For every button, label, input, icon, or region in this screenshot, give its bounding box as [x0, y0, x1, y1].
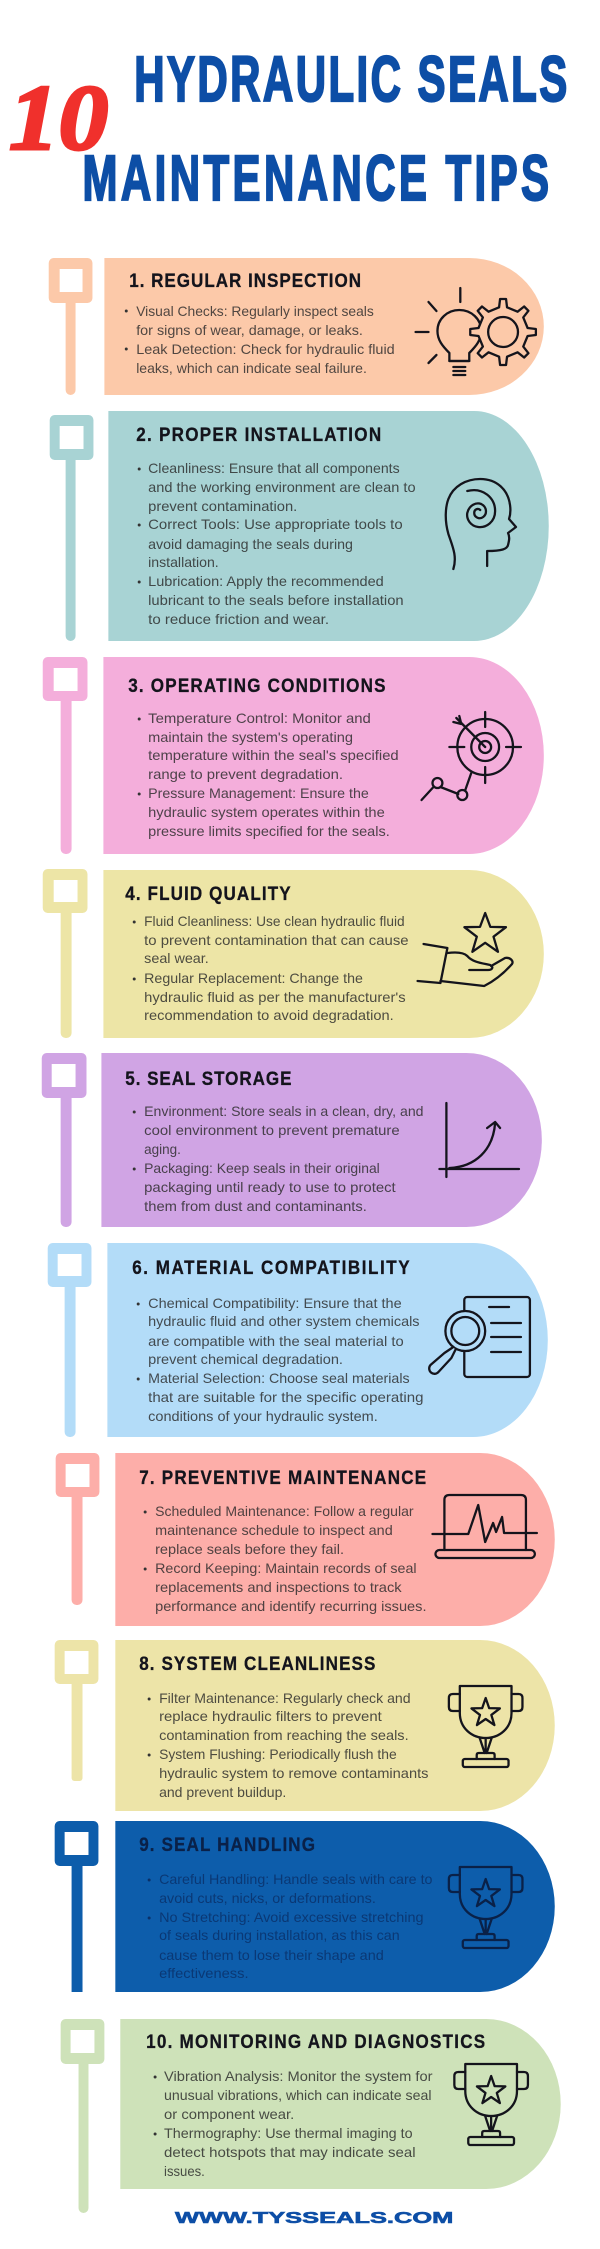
icon: growth curve chart — [439, 1103, 519, 1177]
panel 3: operating conditions — [43, 657, 544, 854]
panel 5: seal storage — [42, 1053, 542, 1227]
panel 1: regular inspection — [49, 258, 544, 395]
body text 10: Vibration Analysis: Monitor the system for — [164, 2068, 433, 2084]
body text 9: avoid cuts, nicks, or deformations. — [159, 1890, 376, 1906]
body text 2 — [138, 460, 416, 627]
body text 1: Visual Checks: Regularly inspect seals — [136, 303, 374, 319]
body text 4: Regular Replacement: Change the — [144, 970, 363, 986]
body text 4: to prevent contamination that can cause — [144, 932, 409, 948]
panel 8: system cleanliness — [55, 1640, 555, 1811]
body text 5: aging. — [144, 1141, 181, 1157]
heading 10: 10. MONITORING AND DIAGNOSTICS — [146, 2030, 485, 2052]
heading 8: 8. SYSTEM CLEANLINESS — [139, 1652, 375, 1674]
body text 3: pressure limits specified for the seals. — [148, 823, 390, 839]
tab marker 9 — [55, 1821, 98, 1992]
body text 5: Packaging: Keep seals in their original — [144, 1160, 380, 1176]
body text 2: Cleanliness: Ensure that all components — [148, 460, 400, 476]
icon: head with spiral — [446, 479, 516, 569]
body text 1 — [125, 303, 395, 376]
body text 6: Material Selection: Choose seal materials — [148, 1370, 410, 1386]
body text 2: Correct Tools: Use appropriate tools to — [148, 516, 403, 532]
body text 3: Temperature Control: Monitor and — [148, 710, 371, 726]
body text 3: temperature within the seal's specified — [148, 747, 399, 763]
body text 3: maintain the system's operating — [148, 729, 353, 745]
body text 5: packaging until ready to use to protect — [144, 1179, 396, 1195]
body text 2: prevent contamination. — [148, 498, 297, 514]
footer website: WWW.TYSSEALS.COM — [175, 2210, 453, 2227]
icon: hand holding star — [418, 913, 513, 986]
heading 4: 4. FLUID QUALITY — [125, 882, 291, 904]
tab marker 2 — [50, 415, 93, 641]
body text 5: them from dust and contaminants. — [144, 1198, 367, 1214]
body text 3 — [138, 710, 399, 839]
body text 3: Pressure Management: Ensure the — [148, 785, 369, 801]
body text 10: issues. — [164, 2163, 205, 2179]
title — [83, 44, 567, 214]
tab marker 8 — [55, 1640, 98, 1781]
icon: trophy on green — [454, 2064, 528, 2145]
icon: trophy — [449, 1686, 522, 1767]
title: MAINTENANCE TIPS — [83, 143, 549, 214]
icon: laptop with pulse line — [432, 1495, 537, 1558]
body text 6: prevent chemical degradation. — [148, 1351, 343, 1367]
icon: trophy on blue — [449, 1867, 522, 1948]
heading 7: 7. PREVENTIVE MAINTENANCE — [139, 1466, 426, 1488]
body text 9: effectiveness. — [159, 1965, 249, 1981]
panel 4: fluid quality — [43, 869, 544, 1038]
tab marker 6 — [48, 1243, 91, 1437]
body text 6: conditions of your hydraulic system. — [148, 1408, 378, 1424]
heading 1: 1. REGULAR INSPECTION — [129, 269, 361, 291]
panel 6: material compatibility — [48, 1243, 548, 1437]
icon: light bulb and gear — [416, 288, 536, 375]
body text 10: or component wear. — [164, 2106, 294, 2122]
body text 6 — [137, 1295, 424, 1424]
title: HYDRAULIC SEALS — [134, 44, 567, 115]
body text 3: hydraulic system operates within the — [148, 804, 385, 820]
body text 2: avoid damaging the seals during — [148, 536, 353, 552]
body text 9: No Stretching: Avoid excessive stretching — [159, 1909, 424, 1925]
icon: target with arrow and line chart — [422, 712, 521, 800]
panel 7: preventive maintenance — [56, 1453, 555, 1626]
body text 10: detect hotspots that may indicate seal — [164, 2144, 416, 2160]
panel 9: seal handling — [55, 1821, 555, 1992]
body text 5 — [133, 1103, 424, 1214]
body text 4: recommendation to avoid degradation. — [144, 1007, 394, 1023]
body text 10 — [154, 2068, 433, 2179]
tab marker 3 — [43, 657, 87, 854]
body text 6: that are suitable for the specific operating — [148, 1389, 424, 1405]
body text 5: Environment: Store seals in a clean, dry, and — [144, 1103, 424, 1119]
body text 8: Filter Maintenance: Regularly check and — [159, 1690, 411, 1706]
body text 2: installation. — [148, 554, 219, 570]
body text 7: replace seals before they fail. — [155, 1541, 344, 1557]
body text 10: Thermography: Use thermal imaging to — [164, 2125, 413, 2141]
body text 6: are compatible with the seal material to — [148, 1333, 404, 1349]
body text 9 — [148, 1871, 433, 1981]
body text 6: hydraulic fluid and other system chemicals — [148, 1313, 420, 1329]
icon: magnifier over document — [429, 1297, 530, 1377]
heading 6: 6. MATERIAL COMPATIBILITY — [132, 1256, 410, 1278]
heading 2: 2. PROPER INSTALLATION — [136, 423, 381, 445]
body text 9: Careful Handling: Handle seals with care to — [159, 1871, 433, 1887]
body text 9: cause them to lose their shape and — [159, 1947, 384, 1963]
red number 10: 10 — [9, 67, 108, 170]
body text 5: cool environment to prevent premature — [144, 1122, 400, 1138]
body text 8: hydraulic system to remove contaminants — [159, 1765, 429, 1781]
body text 1: leaks, which can indicate seal failure. — [136, 360, 367, 376]
body text 8 — [148, 1690, 429, 1800]
body text 4: seal wear. — [144, 950, 209, 966]
body text 6: Chemical Compatibility: Ensure that the — [148, 1295, 402, 1311]
body text 7: Scheduled Maintenance: Follow a regular — [155, 1503, 414, 1519]
body text 3: range to prevent degradation. — [148, 766, 343, 782]
body text 2: and the working environment are clean to — [148, 479, 416, 495]
body text 4 — [133, 913, 409, 1023]
body text 1: for signs of wear, damage, or leaks. — [136, 322, 363, 338]
panel 10: monitoring and diagnostics — [61, 2019, 561, 2213]
body text 8: System Flushing: Periodically flush the — [159, 1746, 397, 1762]
body text 4: Fluid Cleanliness: Use clean hydraulic fluid — [144, 913, 405, 929]
body text 8: replace hydraulic filters to prevent — [159, 1708, 382, 1724]
body text 8: and prevent buildup. — [159, 1784, 286, 1800]
panel 2: proper installation — [50, 411, 549, 641]
tab marker 7 — [56, 1453, 99, 1605]
tab marker 5 — [42, 1053, 86, 1227]
tab marker 1 — [49, 258, 92, 395]
body text 7: replacements and inspections to track — [155, 1579, 402, 1595]
heading 9: 9. SEAL HANDLING — [139, 1833, 315, 1855]
body text 10: unusual vibrations, which can indicate seal — [164, 2087, 431, 2103]
body text 8: contamination from reaching the seals. — [159, 1727, 409, 1743]
body text 7 — [144, 1503, 427, 1614]
tab marker 10 — [61, 2019, 104, 2213]
body text 4: hydraulic fluid as per the manufacturer's — [144, 989, 406, 1005]
body text 7: maintenance schedule to inspect and — [155, 1522, 393, 1538]
heading 3: 3. OPERATING CONDITIONS — [128, 674, 385, 696]
body text 7: performance and identify recurring issues. — [155, 1598, 427, 1614]
body text 7: Record Keeping: Maintain records of seal — [155, 1560, 417, 1576]
body text 9: of seals during installation, as this can — [159, 1927, 400, 1943]
tab marker 4 — [43, 869, 87, 1038]
body text 2: lubricant to the seals before installation — [148, 592, 404, 608]
body text 1: Leak Detection: Check for hydraulic fluid — [136, 341, 395, 357]
body text 2: to reduce friction and wear. — [148, 611, 329, 627]
body text 2: Lubrication: Apply the recommended — [148, 573, 384, 589]
heading 5: 5. SEAL STORAGE — [125, 1067, 291, 1089]
